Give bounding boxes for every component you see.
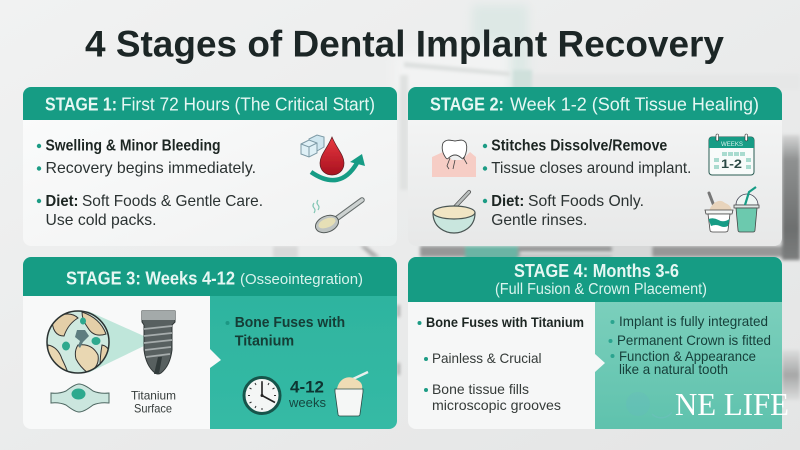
stage 1 bullet list [37,138,263,229]
watermark logo: ONE LIFE: NE LIFE [675,386,789,422]
stage 3 header [23,257,397,296]
titanium surface label: Surface [134,402,172,416]
duration label: weeks [288,395,326,410]
stage 1 header: First 72 Hours (The Critical Start) [121,95,375,115]
stage 4 left bullet list: Painless & Crucial [432,350,542,366]
stage 1 bullet list: Recovery begins immediately. [46,160,256,177]
stage 2 header: STAGE 2: [430,95,504,115]
stage 2 header: Week 1-2 (Soft Tissue Healing) [510,95,759,115]
icon: bowl of soft food with spoon [433,192,475,233]
icon: weeks calendar: WEEKS [721,142,743,148]
icon: ice cubes, blood drop and recovery arrow [301,135,365,180]
stage 4 right bullet list: Function & Appearance [619,348,756,364]
stage 3 key point: Titanium [235,332,294,350]
stage 4 right bullet list: Implant is fully integrated [619,313,768,329]
icon: yogurt cup and green smoothie [705,187,759,232]
stage 4 left bullet list: Bone tissue fills [432,381,529,397]
stage 4 left bullet list: microscopic grooves [432,397,561,413]
stage 1 bullet list: Diet: [46,193,78,210]
stage 3 teal column [210,296,397,429]
stage 1 header: STAGE 1: [45,95,117,115]
icon: tooth and gum with stitches [432,140,476,177]
stage 1 bullet list: Swelling & Minor Bleeding [46,138,220,155]
stage 3 header: STAGE 3: Weeks 4-12 [66,268,235,288]
stage 1 bullet list: Soft Foods & Gentle Care. [82,193,263,210]
stage 2 bullet list: Gentle rinses. [491,212,587,229]
stage 1 bullet list: Use cold packs. [46,212,156,229]
titanium surface label [131,388,176,416]
stage 4 header: (Full Fusion & Crown Placement) [495,281,707,298]
icon: spoon with soft food [313,200,362,236]
panel: stage 3 [23,257,397,429]
stage 2 bullet list: Diet: [491,193,524,210]
stage 4 right bullet list [608,313,771,377]
icon: weeks calendar [709,134,754,175]
stage 1 header [23,87,397,120]
panel: stage 1 [23,87,397,246]
titanium surface label: Titanium [131,388,176,402]
stage 2 bullet list: Stitches Dissolve/Remove [491,138,667,155]
stage 3 key point [226,314,345,350]
icon: clock [244,378,280,414]
stage 3 header: (Osseointegration) [240,272,363,288]
stage 4 left bullet list [418,314,584,413]
stage 2 header [408,87,782,120]
magnified bone and implant illustration [46,311,175,412]
stage 4 left bullet list: Bone Fuses with Titanium [426,314,584,330]
duration label: 4-12 [290,378,324,396]
stage 2 bullet list: Soft Foods Only. [528,193,644,210]
stage 4 right bullet list: like a natural tooth [619,361,728,377]
icon: weeks calendar: 1-2 [721,157,742,171]
stage 4 teal column [595,302,782,429]
panel: stage 4 [408,257,782,429]
stage 4 header [408,257,782,302]
title: 4 Stages of Dental Implant Recovery [85,24,724,64]
stage 3 key point: Bone Fuses with [235,314,345,331]
stage 4 right bullet list: Permanent Crown is fitted [617,332,771,348]
stage 2 bullet list: Tissue closes around implant. [491,160,691,177]
panel: stage 2 [408,87,782,246]
watermark logo: ONE LIFE [626,386,789,422]
icon: soft food cup with straw [335,372,368,416]
stage 2 bullet list [483,138,691,229]
stage 4 header: STAGE 4: Months 3-6 [514,261,679,281]
duration label [288,378,326,410]
